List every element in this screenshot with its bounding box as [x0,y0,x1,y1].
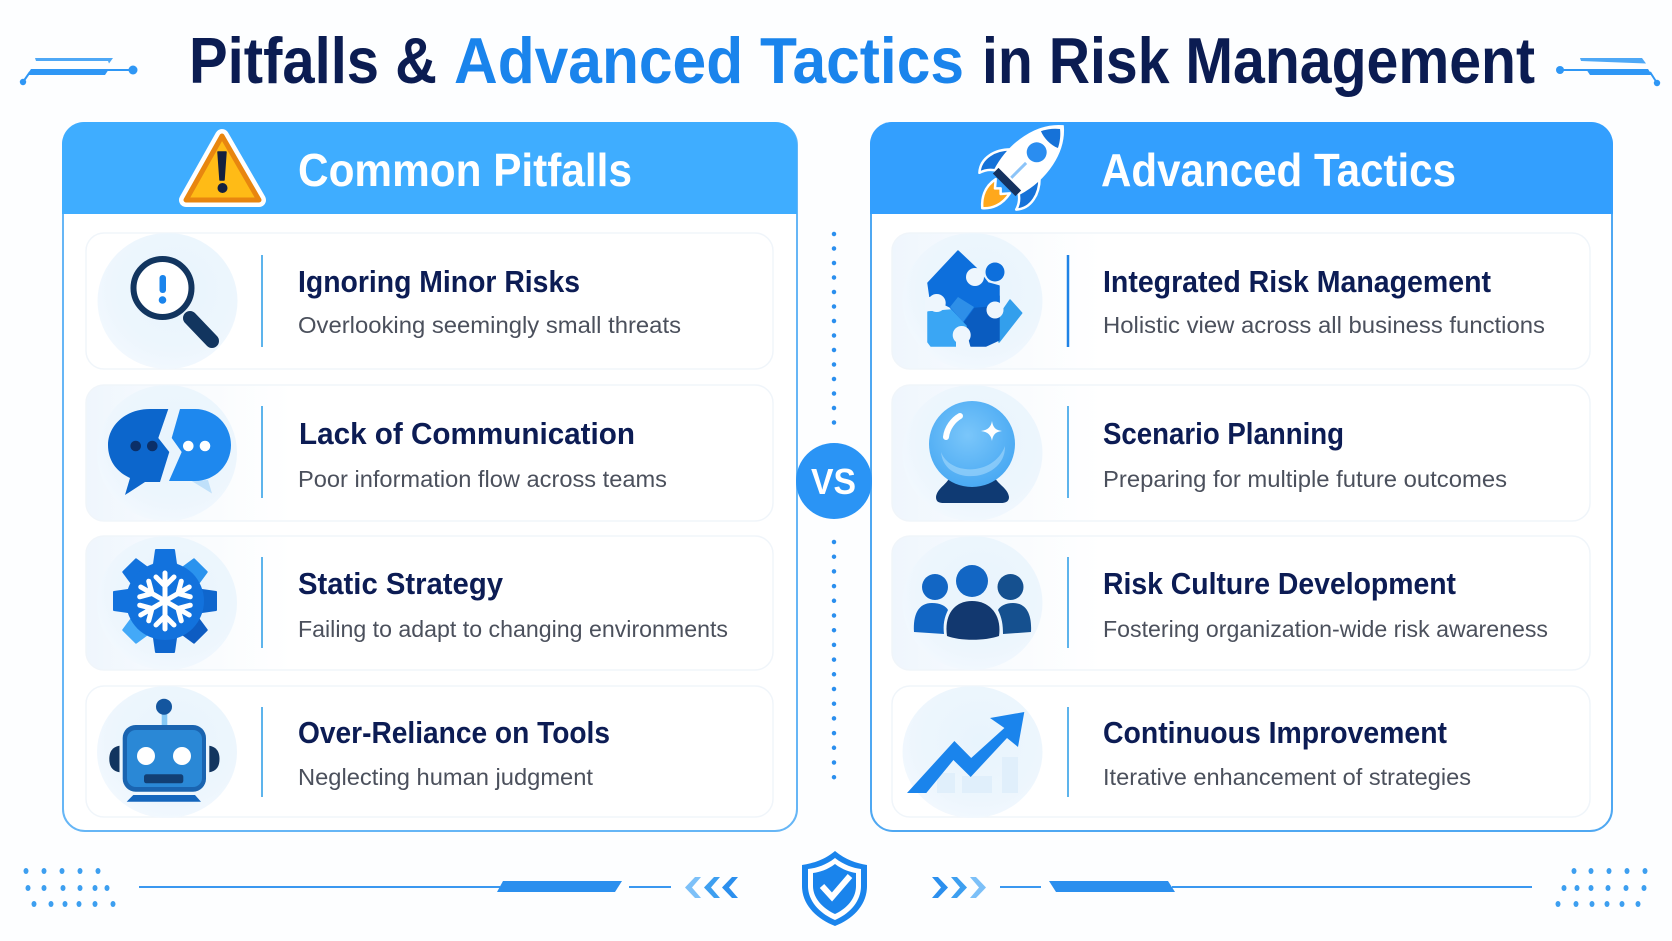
vs badge: VS [811,461,856,502]
panel: common pitfalls [62,122,797,831]
footer ornament right [932,868,1648,907]
item: scenario planning: Preparing for multiple future outcomes [1103,466,1507,492]
item: risk culture development [892,536,1590,670]
item: scenario planning [892,385,1590,521]
title: Advanced Tactics [454,24,964,97]
title: in Risk Management [982,24,1535,97]
item: ignoring minor risks [86,233,773,369]
icon: broken speech bubbles [108,409,231,495]
item: over-reliance on tools: Neglecting human judgment [298,764,593,790]
heading: common pitfalls: Common Pitfalls [298,144,632,196]
item: over-reliance on tools: Over-Reliance on Tools [298,715,610,750]
footer ornament left [24,868,738,907]
icon: robot [109,699,220,802]
item: integrated risk management: Holistic view across all business functions [1103,312,1545,338]
panel header: common pitfalls [62,122,797,214]
panel header: advanced tactics [870,122,1613,214]
item: integrated risk management: Integrated Risk Management [1103,264,1491,299]
icon: frozen gear [114,550,216,652]
item: continuous improvement: Continuous Improvement [1103,715,1447,750]
vs divider [796,234,872,779]
item: lack of communication [86,385,773,521]
item: lack of communication: Lack of Communication [299,416,635,451]
item: continuous improvement [892,686,1590,818]
title ornament left [20,58,137,85]
heading: advanced tactics: Advanced Tactics [1101,144,1456,196]
item: static strategy: Failing to adapt to changing environments [298,616,728,642]
icon: rocket [959,104,1085,230]
item: ignoring minor risks: Overlooking seemingly small threats [298,312,681,338]
item: ignoring minor risks: Ignoring Minor Risks [298,264,580,299]
icon: crystal ball [929,401,1015,503]
item: integrated risk management [892,233,1590,369]
title [189,24,1535,97]
icon: magnifier [134,259,212,341]
item: lack of communication: Poor information flow across teams [298,466,667,492]
icon: shield [802,851,867,926]
item: continuous improvement: Iterative enhancement of strategies [1103,764,1471,790]
panel: advanced tactics [870,104,1613,831]
item: static strategy: Static Strategy [298,566,504,601]
item: static strategy [86,536,773,670]
item: over-reliance on tools [86,686,773,818]
item: risk culture development: Fostering organization-wide risk awareness [1103,616,1548,642]
title: Pitfalls & [189,24,437,97]
icon: puzzle pieces [925,251,1022,348]
item: scenario planning: Scenario Planning [1103,416,1344,451]
icon: team of people [914,565,1031,640]
icon: warning triangle [186,136,259,200]
item: risk culture development: Risk Culture Development [1103,566,1456,601]
icon: rising arrow [907,712,1024,793]
title ornament right [1556,58,1660,86]
vs badge [796,443,872,519]
